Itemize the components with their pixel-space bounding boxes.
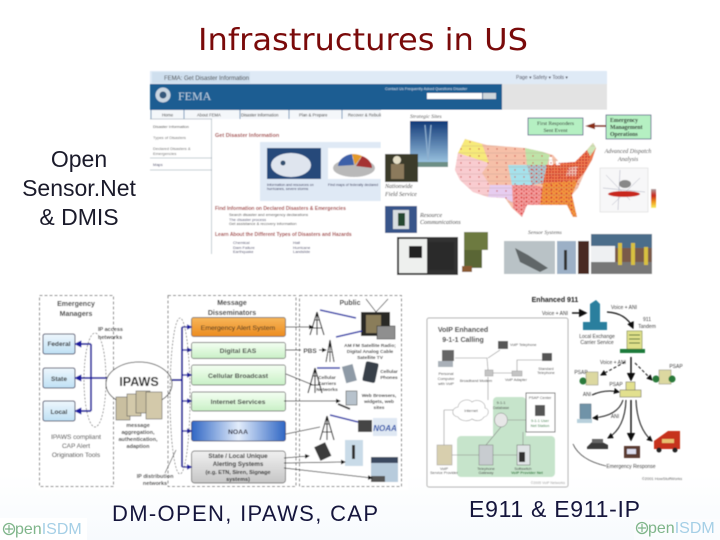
PSAP box: PSAP Center <box>529 396 552 400</box>
9-1-1 database: Database <box>493 406 509 410</box>
group: Emergency Managers: State <box>51 376 67 383</box>
label: Open Sensor.Net and DMIS: Open <box>51 146 107 172</box>
panel: FEMA web page screenshot: Landslide <box>293 249 311 254</box>
panel: FEMA web page screenshot: Dam Failure <box>233 245 256 250</box>
PSAP box: Net Station <box>531 424 549 428</box>
logo: openISDM right <box>634 519 720 540</box>
group: Emergency Managers: IP access <box>98 327 123 333</box>
group: Message Disseminators: State / Local Unique <box>208 453 268 460</box>
group: Message Disseminators <box>168 296 296 486</box>
ANI office building: ANI <box>611 414 619 420</box>
field service photo: Nationwide <box>384 184 413 190</box>
computer icon: Personal <box>438 372 454 376</box>
group: Public: Public <box>339 300 361 307</box>
ANI office building <box>577 392 619 423</box>
group: Emergency Managers: CAP Alert <box>62 443 90 450</box>
panel: FEMA web page screenshot: Home <box>162 112 174 118</box>
computer icon: Computer <box>438 377 455 381</box>
center PSAP building: PSAP <box>609 382 623 388</box>
local exchange building: Local Exchange <box>579 334 615 340</box>
standard telephone icon: Standard <box>538 367 554 371</box>
truck checkpoint photo <box>591 234 652 274</box>
group: Emergency Managers: Emergency <box>57 301 95 308</box>
IPAWS hub: IPAWS <box>119 375 159 389</box>
green VoIP provider zone <box>457 436 555 477</box>
copyright line: ©2001 HowStuffWorks <box>642 476 682 481</box>
label: Open Sensor.Net and DMIS: & DMIS <box>39 204 119 230</box>
green callout: emergency management <box>606 115 651 139</box>
green callout: first responders: First Responders <box>537 121 574 127</box>
hardware photos row <box>397 230 589 275</box>
logo: openISDM right: penISDM <box>648 520 715 537</box>
hardware photos row: Sensor Systems <box>528 230 562 236</box>
VoIP service provider server: VoIP <box>440 467 448 471</box>
panel: sensor network map collage <box>381 110 656 280</box>
VoIP service provider server <box>430 445 459 475</box>
green VoIP provider zone: VoIP Provider Net <box>511 471 544 475</box>
group: Public: Web Browsers, <box>362 393 397 399</box>
green callout: first responders: Sent Event <box>544 128 568 134</box>
group: Public: AM FM Satellite Radio; <box>344 343 396 349</box>
ambulance <box>606 446 656 470</box>
arrow between callouts <box>588 124 606 128</box>
panel: FEMA web page screenshot: Emergencies <box>153 151 176 156</box>
group: Emergency Managers: IPAWS compliant <box>51 434 101 441</box>
panel: FEMA web page screenshot: Contact Us Frequently Asked Questions Disaster <box>385 87 468 91</box>
group: Public: NOAA <box>373 424 397 433</box>
group: Message Disseminators: Emergency Alert System <box>201 325 276 332</box>
panel: FEMA web page screenshot: Page ▾ Safety ▾ Tools ▾ <box>516 75 568 81</box>
group: Emergency Managers: Managers <box>60 311 92 318</box>
group: Message Disseminators: Cellular Broadcast <box>208 373 269 380</box>
VoIP service provider server: Service Provider <box>430 471 459 475</box>
center PSAP building <box>609 382 641 397</box>
group: Message Disseminators: Internet Services <box>211 399 266 406</box>
panel: FEMA web page screenshot: Get Disaster Information <box>215 133 280 139</box>
panel: FEMA web page screenshot: Maps <box>153 162 163 167</box>
strategic sites tower photo: Strategic Sites <box>410 114 442 120</box>
logo: openISDM left: penISDM <box>15 521 82 538</box>
police car <box>587 439 608 449</box>
911 tandem building <box>600 305 656 366</box>
green callout: emergency management: Management <box>610 125 643 131</box>
call flow arrows <box>572 312 652 466</box>
right PSAP building <box>652 364 683 384</box>
panel: FEMA web page screenshot: FEMA: Get Disaster Information <box>164 76 249 82</box>
panel: FEMA web page screenshot: Disaster Information <box>153 124 189 129</box>
standard telephone icon <box>537 353 555 375</box>
computer icon <box>438 350 455 386</box>
group: Public: Digital Analog Cable <box>347 349 394 355</box>
911 tandem building: Voice + ANI <box>611 305 637 311</box>
group: Message Disseminators: Digital EAS <box>220 348 257 355</box>
panel: FEMA web page screenshot: Search disaster and emergency declarations <box>229 212 308 217</box>
resource communications photo <box>385 206 461 233</box>
panel: VoIP Enhanced 9-1-1 diagram: VoIP Enhanced <box>438 327 488 334</box>
group: Public: Networks <box>316 387 338 393</box>
dashed network ellipse right <box>170 318 190 474</box>
telephone gateway: Telephone <box>477 467 495 471</box>
fire truck <box>654 431 680 452</box>
resource communications photo: Resource <box>419 213 442 219</box>
panel: VoIP Enhanced 9-1-1 diagram <box>427 318 568 487</box>
group: Emergency Managers: Federal <box>47 341 71 348</box>
VoIP telephone icon <box>498 341 536 349</box>
group: Message Disseminators: systems) <box>226 477 250 483</box>
911 tandem building: Voice + ANI <box>600 360 626 366</box>
group: Public: Carriers <box>318 381 337 387</box>
group: Public: PBS <box>303 348 317 355</box>
sensor density inset: Advanced Dispatch <box>604 149 651 155</box>
group: Message Disseminators: Disseminators <box>208 310 256 317</box>
panel: FEMA web page screenshot: Find Information on Declared Disasters & Emergencies <box>215 206 346 212</box>
network links <box>444 350 543 455</box>
IPAWS hub: authentication, <box>118 437 158 443</box>
blue connectors to disseminators <box>172 327 191 467</box>
computer icon: with VoIP <box>438 382 454 386</box>
left PSAP building <box>574 370 598 385</box>
panel: IPAWS architecture diagram <box>36 292 408 490</box>
sensor density inset: Analysis <box>617 157 639 163</box>
caption: E911 and E911-IP: E911 & E911-IP <box>469 496 640 522</box>
group: Public: Phones <box>380 375 398 381</box>
group: Public: Cellular <box>318 375 336 381</box>
IPAWS hub: aggregation, <box>121 430 155 436</box>
dashed network ellipse left <box>84 333 106 427</box>
caption: DM-OPEN, IPAWS, CAP: DM-OPEN, IPAWS, CAP <box>112 501 378 526</box>
panel: FEMA web page screenshot: Get assistance & recovery information <box>229 221 297 226</box>
IPAWS hub: adaption <box>127 444 150 450</box>
panel: FEMA web page screenshot: Hurricane <box>293 245 311 250</box>
panel: FEMA web page screenshot: Types of Disasters <box>153 135 186 140</box>
911 tandem building: 911 <box>643 317 651 323</box>
field service photo <box>384 154 418 198</box>
ambulance: Emergency Response <box>606 464 656 470</box>
911 tandem building: Tandem <box>638 324 656 330</box>
modem and adapter: VoIP Adapter <box>505 378 528 382</box>
panel: FEMA web page screenshot: Information and resources on <box>267 183 314 187</box>
label: Open Sensor.Net and DMIS: Sensor.Net <box>22 175 136 201</box>
internet cloud: Internet <box>464 408 479 413</box>
internet cloud <box>453 400 488 421</box>
heading: Enhanced 911 <box>532 297 578 304</box>
panel: FEMA web page screenshot: Chemical <box>233 240 250 245</box>
panel: VoIP Enhanced 9-1-1 diagram: 9-1-1 Calling <box>442 337 484 344</box>
group: Message Disseminators: Message <box>217 300 247 307</box>
softswitch server <box>514 445 532 471</box>
group: Public: widgets, web <box>363 399 394 405</box>
modem and adapter: Broadband Modem <box>460 379 492 383</box>
panel: FEMA web page screenshot: Learn About the Different Types of Disasters and Hazards <box>215 232 352 238</box>
9-1-1 database: 9-1-1 <box>497 401 505 405</box>
panel: FEMA web page screenshot: Recover & Rebuild <box>348 112 384 118</box>
VoIP telephone icon: VoIP Telephone <box>510 343 536 347</box>
panel: FEMA web page screenshot: Disaster Information <box>241 112 279 118</box>
sensor density inset <box>600 149 656 212</box>
resource communications photo: Communications <box>420 220 461 226</box>
group: Public: Cellular <box>380 369 398 375</box>
blue connectors from IPAWS to managers <box>76 344 108 411</box>
panel: FEMA web page screenshot: The disaster process <box>229 217 266 222</box>
group: Emergency Managers: Origination Tools <box>52 452 101 459</box>
title: Infrastructures in US <box>198 23 528 58</box>
copyright line: ©2005 VoIP Networks <box>531 481 565 485</box>
group: Emergency Managers: Local <box>51 409 68 416</box>
standard telephone icon: Telephone <box>537 371 555 375</box>
group: Public <box>300 296 402 486</box>
logo: openISDM left <box>0 518 87 540</box>
group: Message Disseminators: Alerting Systems <box>213 461 264 468</box>
green database zone <box>493 397 526 439</box>
field service photo: Field Service <box>384 192 417 198</box>
telephone gateway <box>477 445 495 475</box>
green callout: emergency management: Emergency <box>610 118 638 124</box>
IPAWS hub <box>106 362 172 450</box>
local exchange building <box>542 300 615 346</box>
right PSAP building: PSAP <box>669 364 683 370</box>
panel: FEMA web page screenshot: Hail <box>293 240 300 245</box>
local exchange building: Voice + ANI <box>542 311 568 317</box>
strategic sites tower photo <box>410 114 448 167</box>
panel: FEMA web page screenshot: About FEMA <box>197 112 221 118</box>
panel: FEMA web page screenshot: FEMA <box>178 89 212 103</box>
panel: FEMA web page screenshot: hurricanes, severe storms <box>267 187 309 191</box>
IP distribution networks label: networks <box>143 481 167 487</box>
panel: FEMA web page screenshot: Plan & Prepare <box>299 112 328 118</box>
group: Message Disseminators: NOAA <box>228 429 248 436</box>
local exchange building: Carrier Service <box>580 340 614 346</box>
panel: FEMA web page screenshot <box>150 71 607 254</box>
panel: FEMA web page screenshot: Find maps of federally declared <box>328 183 378 187</box>
left PSAP building: PSAP <box>574 370 588 376</box>
US sensor map <box>455 139 596 217</box>
green callout: first responders <box>528 118 583 135</box>
modem and adapter <box>460 370 528 383</box>
IP distribution networks label <box>137 450 176 487</box>
group: Public: sites <box>374 405 385 411</box>
panel: FEMA web page screenshot: Earthquake <box>233 249 254 254</box>
IPAWS hub: message <box>126 423 150 429</box>
PSAP box <box>526 393 555 432</box>
PSAP box: 9-1-1 User <box>531 419 550 423</box>
group: Message Disseminators: (e.g. ETN, Siren, Signage <box>205 470 271 476</box>
ANI office building: ANI <box>583 392 591 398</box>
telephone gateway: Gateway <box>479 471 494 475</box>
9-1-1 database <box>493 401 509 427</box>
IP distribution networks label: IP distribution <box>137 474 174 480</box>
output arrows to public endpoints <box>284 327 372 478</box>
group: Public: Satellite TV <box>357 355 384 361</box>
softswitch server: Softswitch <box>514 467 532 471</box>
group: Emergency Managers: networks <box>98 335 122 341</box>
group: Emergency Managers <box>40 296 123 486</box>
panel: FEMA web page screenshot: Declared Disasters & <box>153 146 191 151</box>
panel: Enhanced 911 call flow <box>532 297 683 481</box>
green callout: emergency management: Operations <box>610 132 638 138</box>
